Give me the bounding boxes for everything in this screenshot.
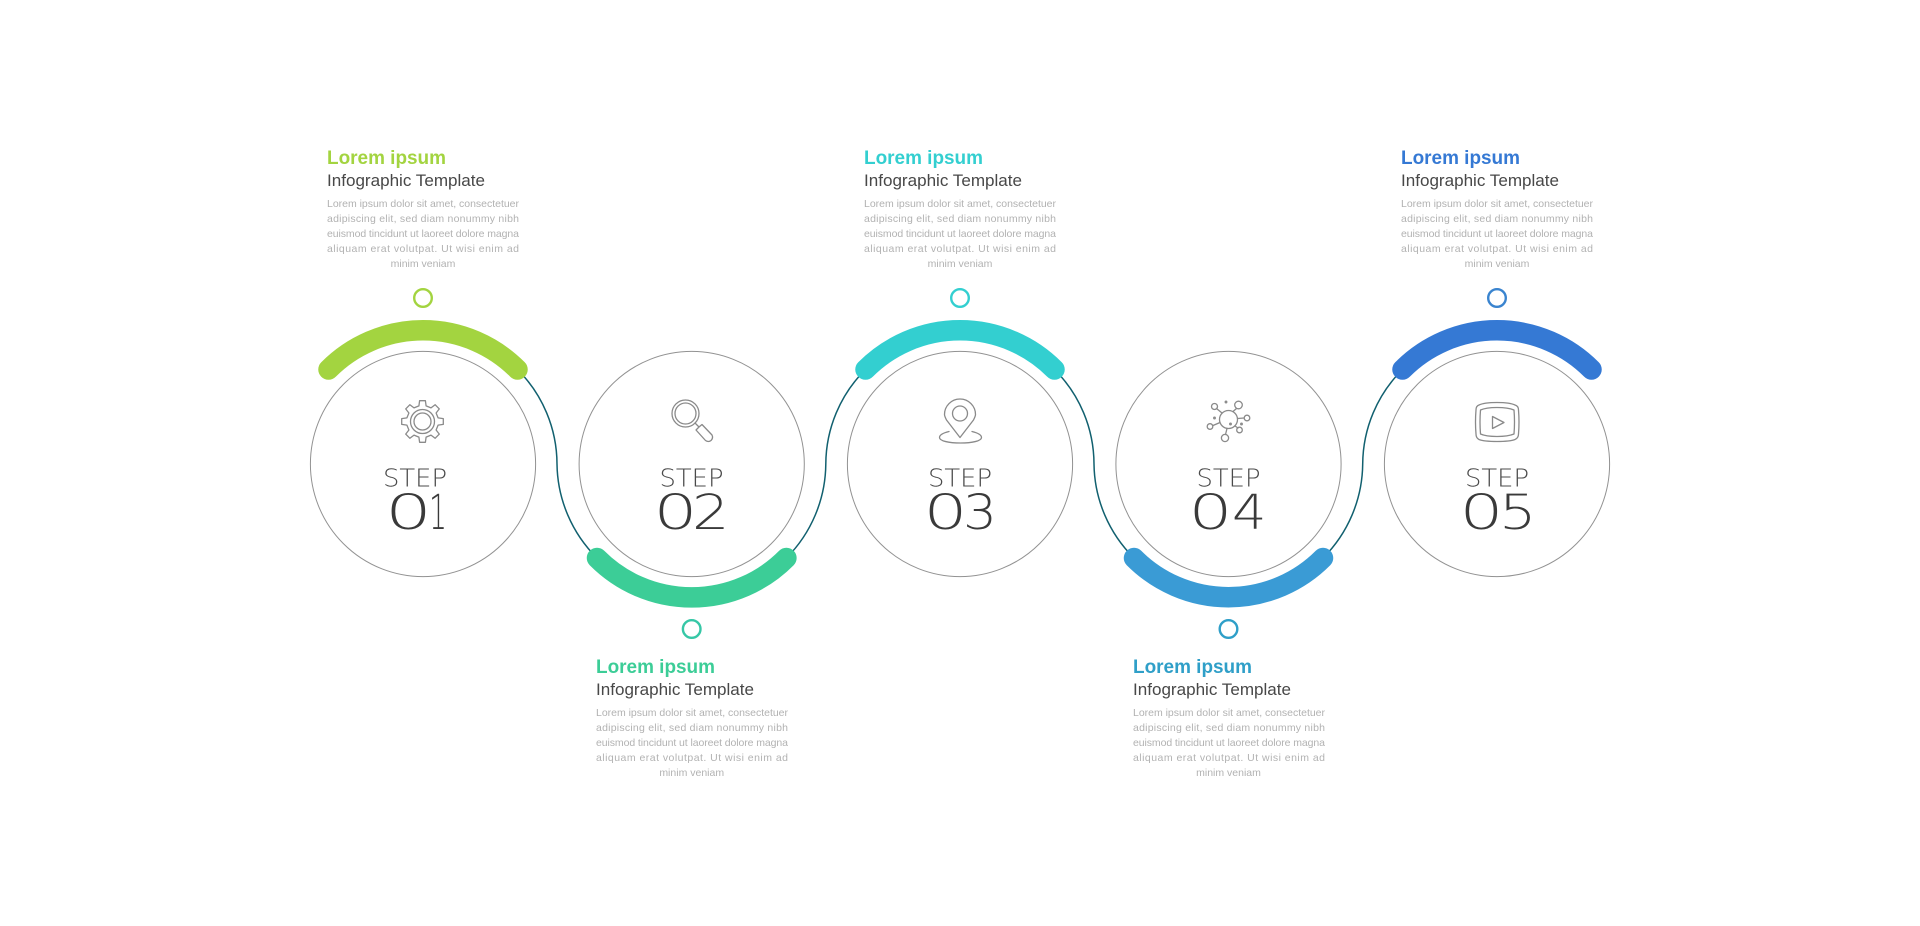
step 5 text block: Infographic Template (1401, 172, 1559, 190)
icon: play screen (1476, 402, 1519, 442)
step 3 text block: euismod tincidunt ut laoreet dolore magna (864, 228, 1056, 240)
step 1 text block: euismod tincidunt ut laoreet dolore magna (327, 228, 519, 240)
step 2 text block: adipiscing elit, sed diam nonummy nibh (596, 722, 788, 734)
step 3 arc (866, 330, 1054, 370)
step 3 label: STEP (928, 464, 992, 492)
step 2 text block: Infographic Template (596, 681, 754, 699)
step 1 circle (310, 351, 536, 577)
step 5 circle (1384, 351, 1610, 577)
step 5 marker dot (1488, 289, 1506, 307)
step 3 (847, 148, 1073, 577)
step 2 circle (579, 351, 804, 577)
step 4 text block: euismod tincidunt ut laoreet dolore magna (1133, 737, 1325, 749)
step 4 marker dot (1220, 620, 1237, 638)
step 5 text block: Lorem ipsum (1401, 148, 1520, 169)
step 1 marker dot (414, 289, 432, 307)
step 3 text block (864, 148, 1056, 270)
step 4 (1116, 351, 1341, 779)
step 1 number (385, 485, 447, 541)
step 1 text block: Infographic Template (327, 172, 485, 190)
step 4 text block: minim veniam (1196, 767, 1261, 779)
step 5 label: STEP (1465, 464, 1529, 492)
step 2 label: STEP (660, 464, 724, 492)
step 1 number: 0 (385, 485, 432, 541)
step 2 text block (596, 657, 788, 779)
step 5 text block: euismod tincidunt ut laoreet dolore magna (1401, 228, 1593, 240)
step 1 arc (328, 330, 518, 370)
step 3 marker dot (951, 289, 969, 307)
step 4 arc (1134, 558, 1323, 597)
step 1 text block (327, 148, 520, 270)
icon: network cluster (1207, 401, 1250, 442)
step 5 number (1460, 485, 1536, 541)
step 4 text block: adipiscing elit, sed diam nonummy nibh (1133, 722, 1325, 734)
step 4 text block: aliquam erat volutpat. Ut wisi enim ad (1133, 752, 1325, 764)
step 1 text block: Lorem ipsum dolor sit amet, consectetuer (327, 198, 520, 210)
step 1 number: 1 (429, 485, 447, 541)
icon: magnifier (672, 400, 713, 442)
step 3 text block: Lorem ipsum (864, 148, 983, 169)
step 2 text block: Lorem ipsum dolor sit amet, consectetuer (596, 707, 788, 719)
step 1 text block: Lorem ipsum (327, 148, 446, 169)
step 1 text block: aliquam erat volutpat. Ut wisi enim ad (327, 243, 519, 255)
step 2 number (654, 485, 730, 541)
step 1 text block: adipiscing elit, sed diam nonummy nibh (327, 213, 519, 225)
step 5 text block: Lorem ipsum dolor sit amet, consectetuer (1401, 198, 1594, 210)
step 5 arc (1402, 330, 1592, 370)
step 5 number: 0 (1460, 485, 1504, 541)
step 4 text block: Lorem ipsum (1133, 657, 1252, 678)
step 4 text block (1133, 657, 1326, 779)
step 4 number: 0 (1188, 485, 1232, 541)
step 2 text block: minim veniam (659, 767, 724, 779)
step 2 text block: euismod tincidunt ut laoreet dolore magna (596, 737, 788, 749)
step 2 number: 2 (692, 485, 730, 541)
step 1 label: STEP (383, 464, 447, 492)
step 2 text block: Lorem ipsum (596, 657, 715, 678)
icon: location pin (940, 399, 982, 443)
step 4 label: STEP (1196, 464, 1260, 492)
step 4 text block: Infographic Template (1133, 681, 1291, 699)
connector line (518, 370, 1402, 558)
step 1 text block: minim veniam (391, 258, 456, 270)
step 3 circle (847, 351, 1073, 577)
step 3 text block: aliquam erat volutpat. Ut wisi enim ad (864, 243, 1056, 255)
step 2 (579, 351, 804, 779)
step 1 (310, 148, 536, 577)
step 5 (1384, 148, 1610, 577)
step 2 marker dot (683, 620, 700, 638)
step 4 number (1188, 485, 1266, 541)
step 4 text block: Lorem ipsum dolor sit amet, consectetuer (1133, 707, 1326, 719)
step 2 number: 0 (654, 485, 698, 541)
step 3 number (924, 485, 997, 541)
step 2 text block: aliquam erat volutpat. Ut wisi enim ad (596, 752, 788, 764)
step 5 number: 5 (1499, 485, 1536, 541)
step 5 text block: aliquam erat volutpat. Ut wisi enim ad (1401, 243, 1593, 255)
step 5 text block: adipiscing elit, sed diam nonummy nibh (1401, 213, 1593, 225)
step 5 text block: minim veniam (1465, 258, 1530, 270)
step 5 text block (1401, 148, 1594, 270)
step 3 text block: Infographic Template (864, 172, 1022, 190)
step 3 text block: minim veniam (928, 258, 993, 270)
step 4 circle (1116, 351, 1341, 577)
step 4 number: 4 (1232, 485, 1266, 541)
step 3 text block: Lorem ipsum dolor sit amet, consectetuer (864, 198, 1056, 210)
step 2 arc (597, 558, 786, 597)
icon: gear (402, 401, 443, 442)
step 3 text block: adipiscing elit, sed diam nonummy nibh (864, 213, 1056, 225)
step 3 number: 3 (963, 485, 997, 541)
step 3 number: 0 (924, 485, 968, 541)
